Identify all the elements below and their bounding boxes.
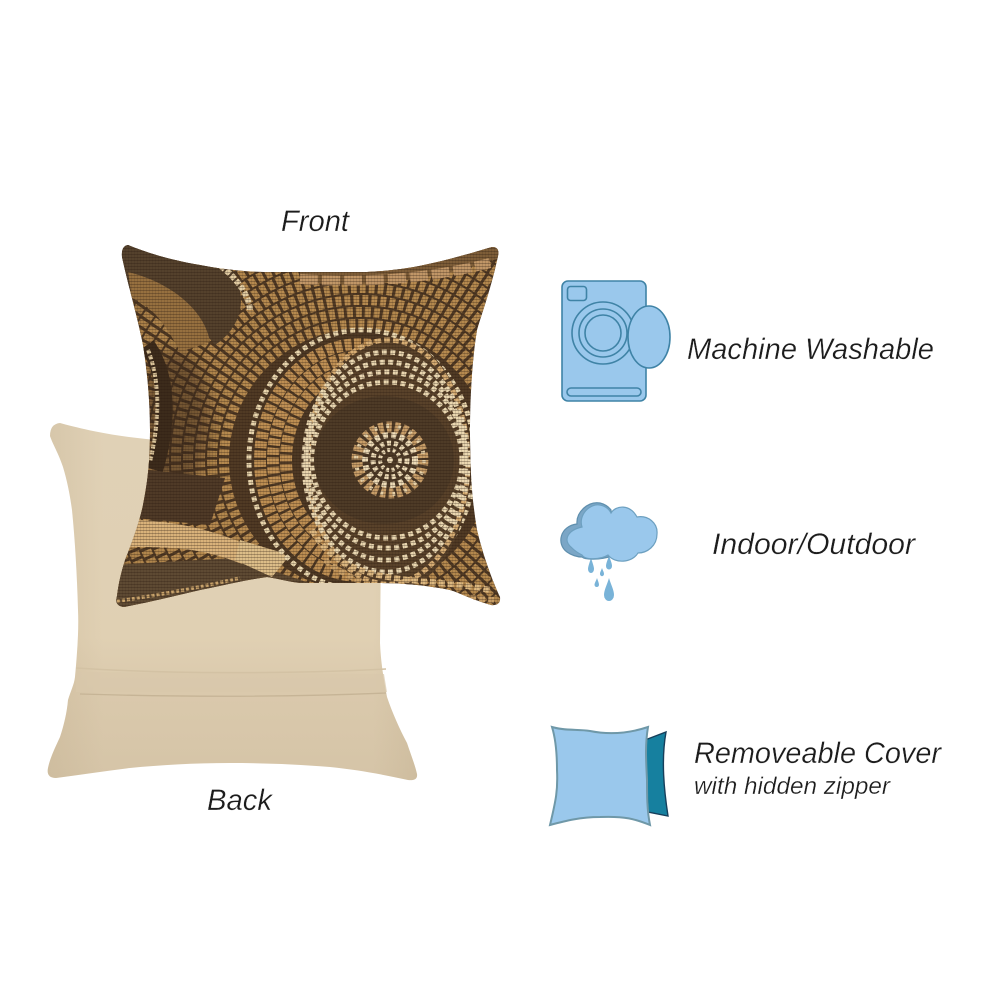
inner ray block inside outer dot ring (283, 438, 471, 584)
central dark band (314, 396, 454, 524)
label: Back: Back (207, 784, 274, 817)
label: with hidden zipper: with hidden zipper (694, 773, 891, 800)
rays outer (116, 247, 500, 607)
label: Machine Washable: Machine Washable (687, 333, 934, 366)
label: Removeable Cover: Removeable Cover (694, 737, 942, 770)
top-right outer rim (300, 247, 498, 284)
label: Front: Front (281, 205, 351, 238)
icon: pillow with removable cover (550, 727, 668, 825)
left dark region upper (118, 240, 241, 345)
icon: washing machine (562, 281, 670, 401)
back pillow (48, 423, 417, 780)
front pillow (116, 245, 500, 607)
lower left dark (135, 470, 225, 525)
dark shading on left tiles (140, 350, 210, 490)
back pillow zipper flap seam (76, 668, 387, 696)
woven texture (116, 245, 500, 606)
dense dot rings (305, 340, 470, 590)
central dotted medallion (356, 426, 424, 494)
label: Indoor/Outdoor: Indoor/Outdoor (712, 528, 916, 561)
icon: rain cloud (561, 503, 657, 601)
outer dot ring (249, 330, 475, 590)
lower dot spread (312, 530, 495, 600)
left vertical ring (147, 345, 165, 470)
